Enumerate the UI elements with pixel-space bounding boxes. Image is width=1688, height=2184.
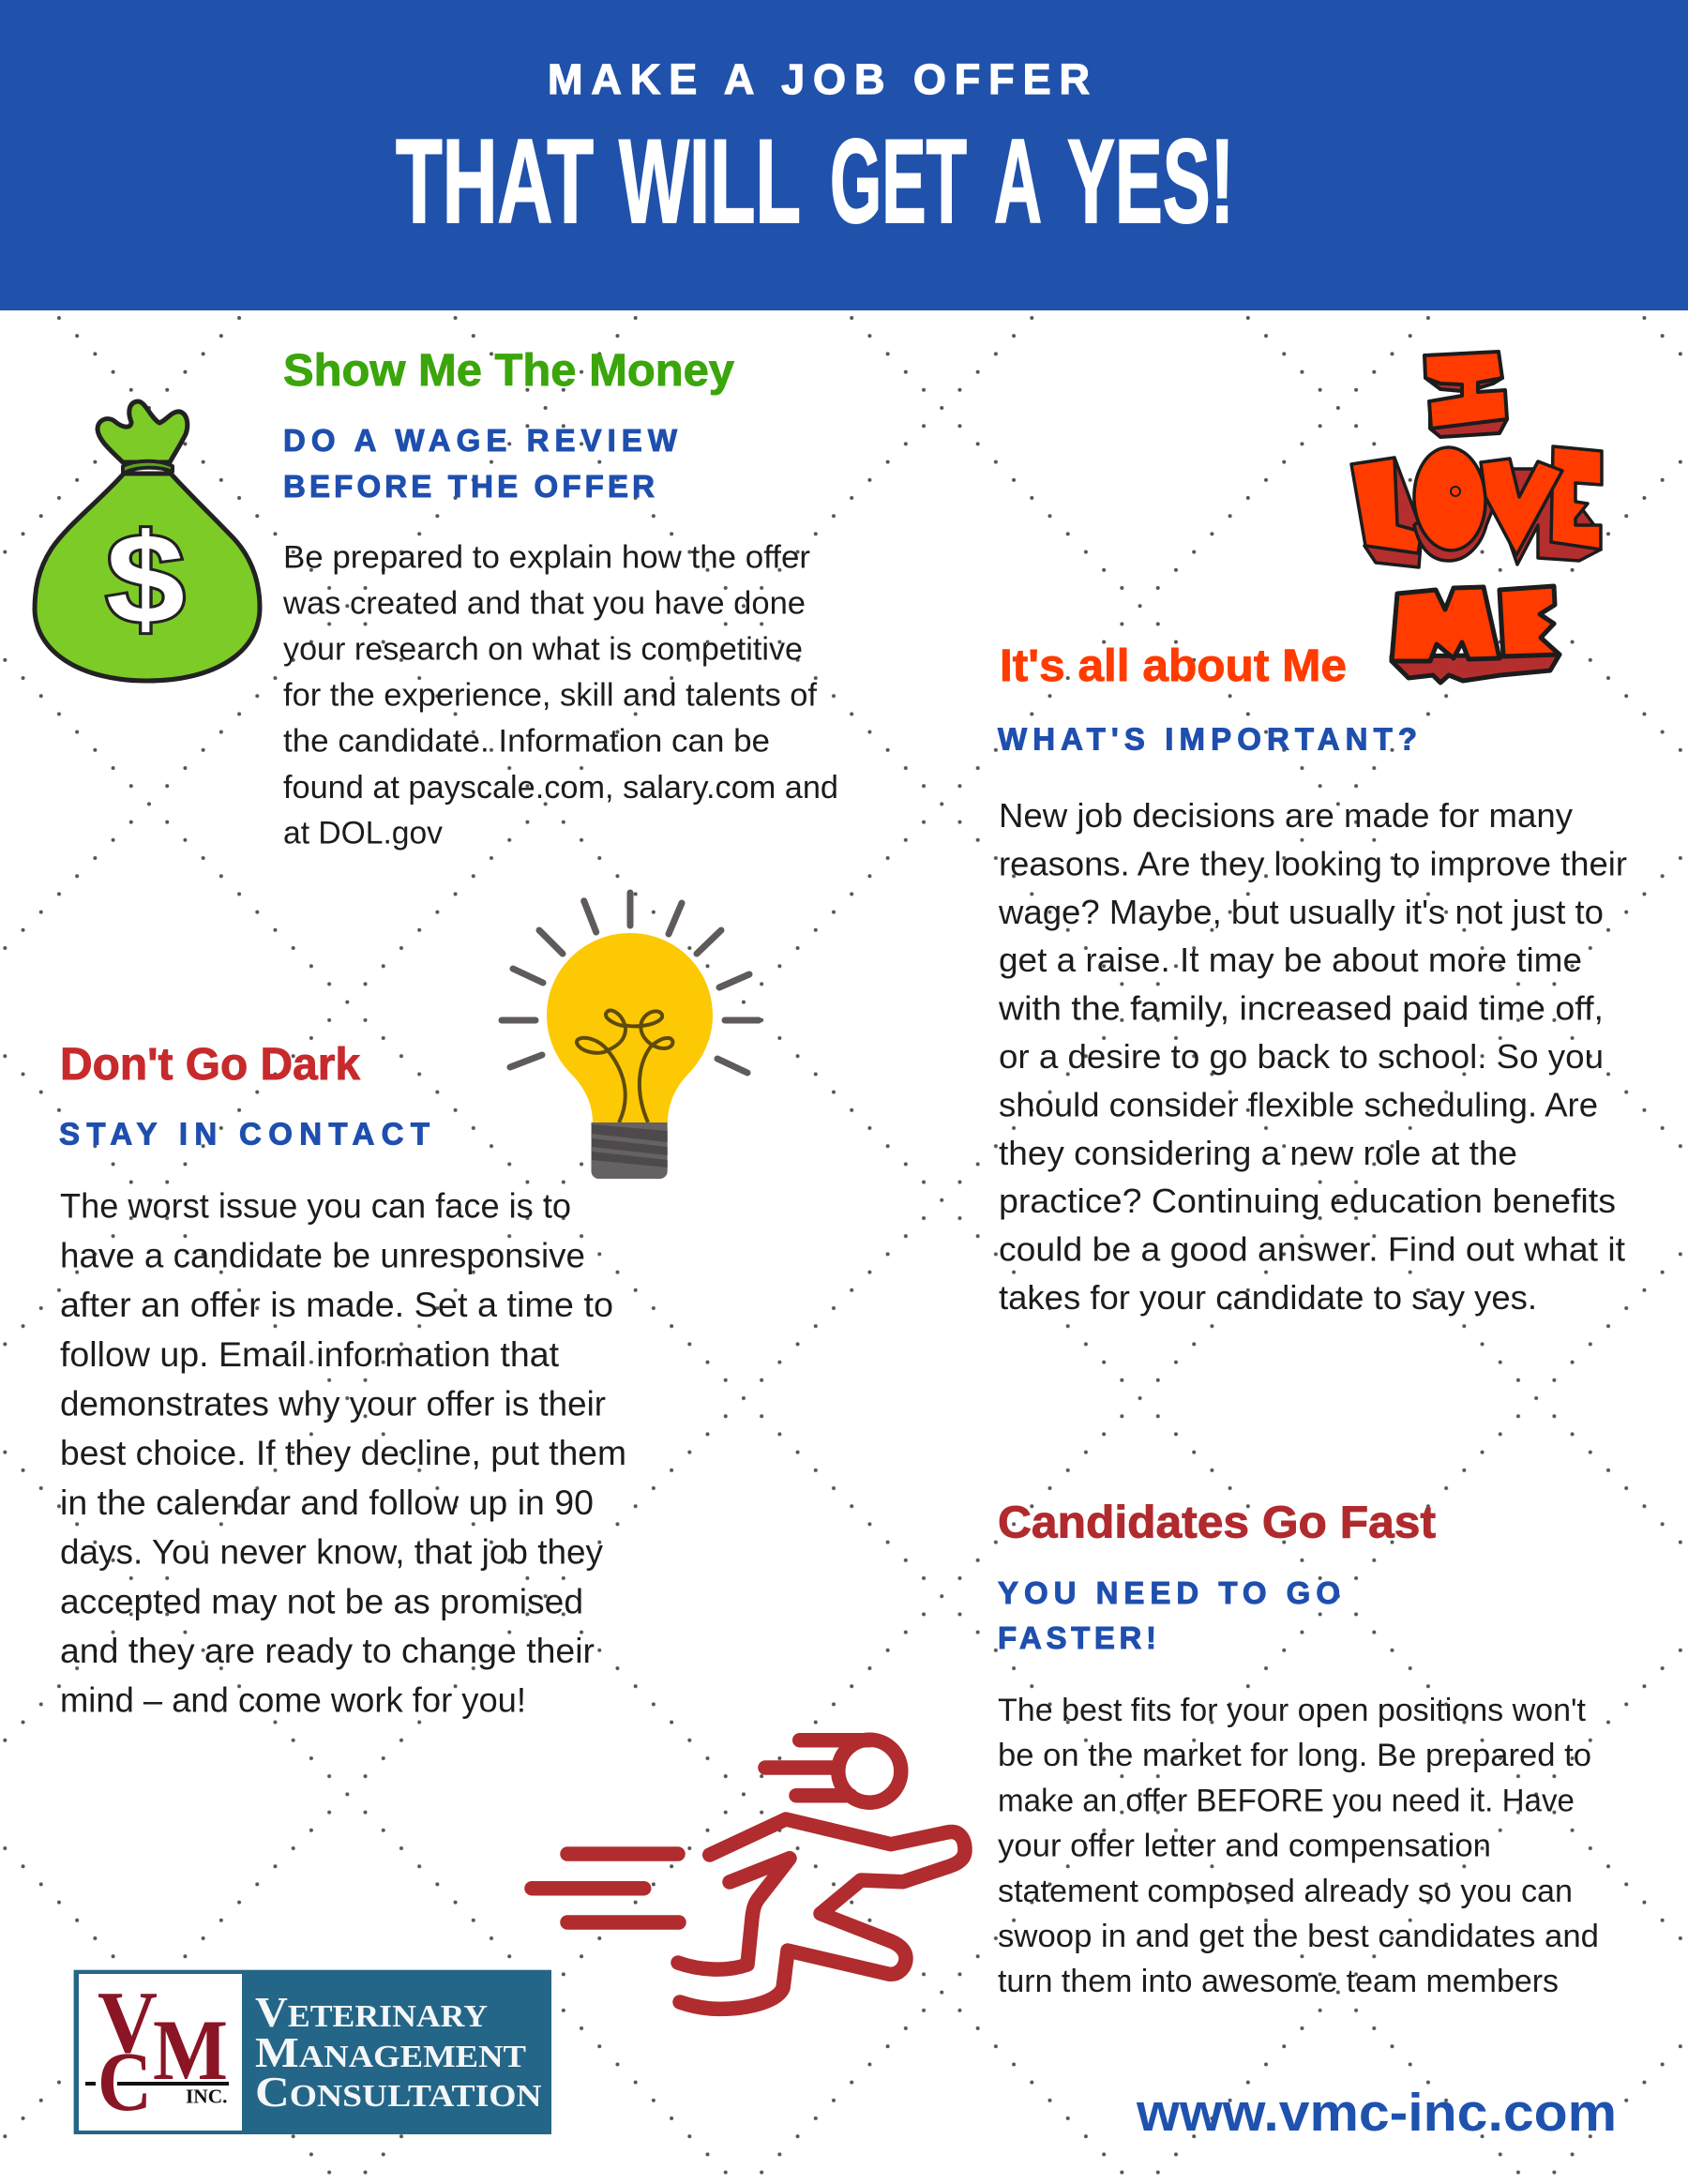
logo: vmc inc [74,1970,551,2134]
body text: best choice. If they decline, put them [60,1434,626,1472]
body text: for the experience, skill and talents of [283,678,817,714]
body text: The worst issue you can face is to [60,1187,571,1226]
panel: show me the money [282,346,838,851]
body text [998,1693,1599,1999]
body text: and they are ready to change their [60,1632,595,1670]
body text: statement composed already so you can [998,1874,1573,1909]
subheading: STAY IN CONTACT [59,1117,430,1152]
icon: i love me lettering [1351,352,1602,683]
panel: it's all about me [998,641,1627,1317]
icon: running person [532,1740,965,2009]
title line: that will get a yes [396,114,1234,248]
body text: mind – and come work for you! [60,1681,526,1720]
logo monogram: C [98,2036,152,2129]
title line: make a job offer: MAKE A JOB OFFER [548,55,1090,103]
logo monogram: V [98,1974,158,2071]
body text: your research on what is competitive [283,632,803,668]
header banner [0,0,1688,310]
title line: that will get a yes: WILL [619,114,801,248]
body text: with the family, increased paid time off, [998,989,1604,1028]
title line: that will get a yes: THAT [396,114,594,248]
body text [60,1187,626,1720]
subheading [283,423,678,504]
body text: found at payscale.com, salary.com and [283,770,838,806]
heading: Show Me The Money [283,346,734,396]
word: ME [1392,586,1560,683]
icon: light bulb [502,893,759,1179]
body text: have a candidate be unresponsive [60,1236,585,1274]
logo monogram: M [153,2002,228,2098]
logo wordmark: CONSULTATION [255,2068,542,2116]
panel: don't go dark [59,1040,626,1720]
body text: New job decisions are made for many [999,796,1573,835]
body text: reasons. Are they looking to improve their [999,844,1627,882]
body text [998,796,1627,1317]
body text: get a raise. It may be about more time [999,941,1582,979]
subheading: FASTER! [998,1620,1156,1655]
body text: in the calendar and follow up in 90 [60,1484,594,1522]
body text: they considering a new role at the [999,1134,1517,1172]
body text: practice? Continuing education benefits [999,1182,1616,1220]
logo wordmark: MANAGEMENT [255,2028,526,2076]
body text: was created and that you have done [282,586,806,622]
heading: Candidates Go Fast [998,1498,1436,1547]
body text: at DOL.gov [283,816,444,851]
title line: that will get a yes: YES! [1067,114,1234,248]
heading: Don't Go Dark [60,1040,360,1090]
word: LOVE [1351,445,1602,567]
subheading: BEFORE THE OFFER [283,469,655,504]
icon: money bag: $ [106,507,185,650]
logo monogram [85,1974,229,2129]
filament [577,1011,672,1122]
body text: accepted may not be as promised [60,1582,583,1620]
body text: should consider flexible scheduling. Are [999,1085,1598,1123]
body text: days. You never know, that job they [60,1533,603,1572]
logo wordmark [255,1988,542,2116]
body text: after an offer is made. Set a time to [60,1286,613,1324]
subheading: DO A WAGE REVIEW [283,423,678,458]
title line: that will get a yes: A [994,114,1042,248]
body text: demonstrates why your offer is their [60,1384,606,1423]
bulb base [591,1122,668,1179]
body text: swoop in and get the best candidates and [998,1919,1599,1954]
body text: your offer letter and compensation [998,1829,1491,1864]
bulb rays [502,893,759,1073]
subheading [998,1575,1340,1655]
body text: or a desire to go back to school. So you [999,1037,1604,1076]
logo monogram: INC. [186,2086,227,2108]
panel: candidates go fast [998,1498,1599,1999]
body text: turn them into awesome team members [998,1964,1559,1999]
icon: money bag [35,401,260,681]
body text: wage? Maybe, but usually it's not just to [998,893,1604,931]
subheading: YOU NEED TO GO [998,1575,1340,1610]
body text: the candidate. Information can be [283,724,770,760]
body text: takes for your candidate to say yes. [999,1278,1537,1317]
body text [282,540,838,851]
subheading: WHAT'S IMPORTANT? [998,722,1417,757]
website url: www.vmc-inc.com [1136,2083,1617,2143]
body text: could be a good answer. Find out what it [999,1230,1625,1269]
body text: be on the market for long. Be prepared to [998,1738,1591,1773]
title line: that will get a yes: GET [830,114,967,248]
logo wordmark: VETERINARY [255,1988,488,2036]
body text: Be prepared to explain how the offer [283,540,810,576]
body text: follow up. Email information that [60,1335,560,1374]
heading: It's all about Me [1000,641,1347,691]
body text: The best fits for your open positions won't [998,1693,1587,1728]
body text: make an offer BEFORE you need it. Have [998,1783,1575,1818]
letter group: I [1424,352,1507,437]
